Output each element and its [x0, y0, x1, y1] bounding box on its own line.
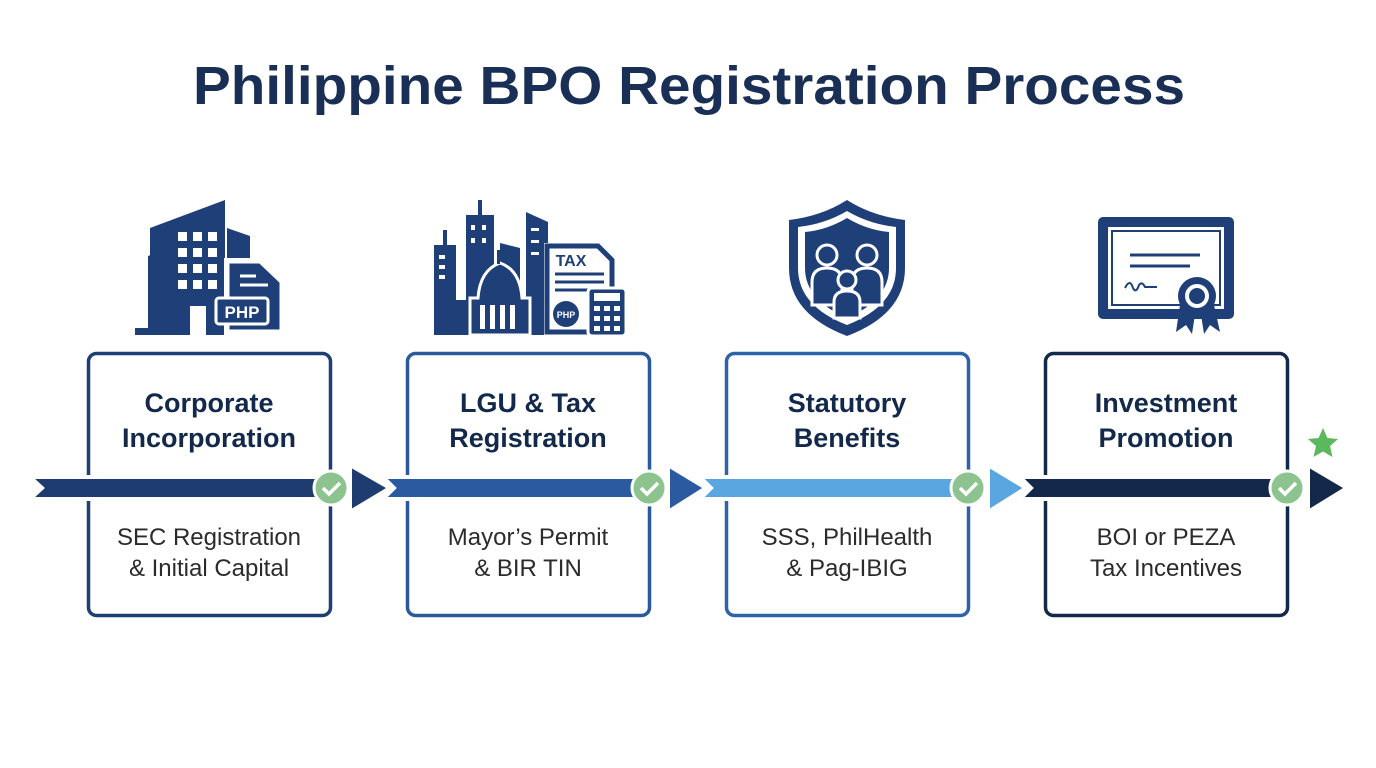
panel: investment promotion: Tax Incentives	[1090, 555, 1242, 582]
panel: corporate incorporation: Corporate	[144, 388, 274, 418]
panel: statutory benefits: Statutory	[788, 388, 906, 418]
panel: investment promotion: BOI or PEZA	[1097, 524, 1235, 551]
panel: corporate incorporation: SEC Registration	[117, 524, 301, 551]
title: Philippine BPO Registration Process	[193, 56, 1185, 116]
icon: city hall with tax document: TAX	[556, 253, 587, 270]
panel: LGU & tax registration: LGU & Tax	[460, 388, 596, 418]
arrow: timeline	[30, 465, 1347, 512]
panel: LGU & tax registration	[408, 354, 650, 616]
panel: investment promotion: Promotion	[1098, 423, 1234, 453]
icon: building with PHP document: PHP	[225, 303, 259, 322]
icon: star	[1308, 428, 1338, 457]
panel: LGU & tax registration: Mayor’s Permit	[448, 524, 609, 551]
panel: statutory benefits: & Pag-IBIG	[786, 555, 908, 582]
panel: LGU & tax registration: & BIR TIN	[474, 555, 582, 582]
panel: corporate incorporation: Incorporation	[122, 423, 296, 453]
icon: certificate	[1098, 217, 1234, 334]
panel: statutory benefits: Benefits	[794, 423, 900, 453]
icon: check marks	[314, 471, 1304, 505]
panel: corporate incorporation	[88, 354, 330, 616]
icon: shield with family	[789, 200, 905, 336]
panel: investment promotion: Investment	[1095, 388, 1237, 418]
panel: statutory benefits	[726, 354, 968, 616]
icon: city hall with tax document: PHP	[557, 310, 575, 320]
panel: LGU & tax registration: Registration	[449, 423, 607, 453]
panel: investment promotion	[1046, 354, 1288, 616]
panel: statutory benefits: SSS, PhilHealth	[762, 524, 932, 551]
icon: building with PHP document	[135, 200, 285, 335]
icon: city hall with tax document	[434, 200, 626, 336]
panel: corporate incorporation: & Initial Capital	[129, 555, 289, 582]
